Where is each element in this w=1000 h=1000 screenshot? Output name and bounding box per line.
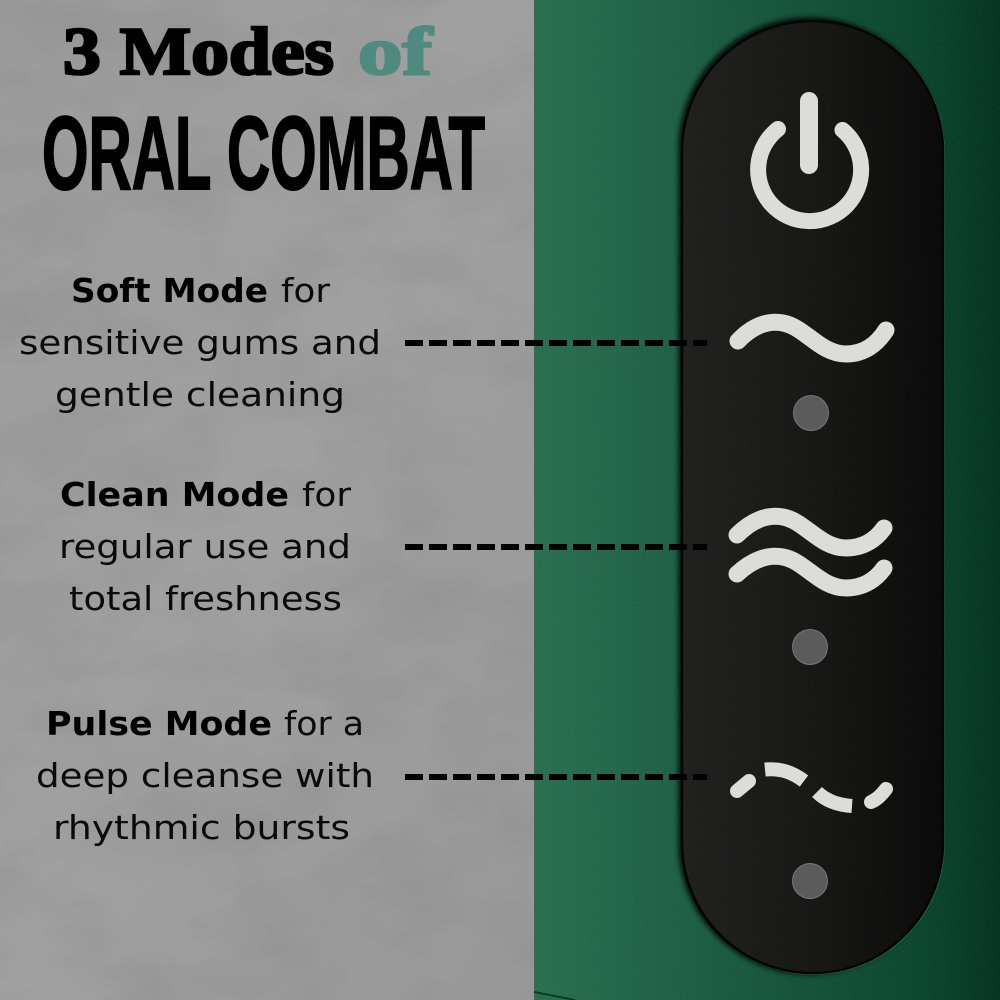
- text block: clean mode: Clean Mode: [60, 475, 289, 514]
- text block: clean mode: regular use and: [59, 527, 351, 566]
- icon: double wave, clean mode: [737, 516, 884, 588]
- connector: pulse mode: [405, 774, 707, 780]
- text block: pulse mode: Pulse Mode: [46, 704, 272, 743]
- text block: soft mode: [19, 271, 381, 414]
- icon: power symbol: [758, 101, 861, 221]
- icon: indicator dot, clean mode: [792, 630, 828, 664]
- panel: black control strip: [678, 17, 944, 975]
- text block: pulse mode: for a: [284, 704, 364, 743]
- text block: clean mode: [59, 475, 351, 618]
- title: 3 Modes of: 3 Modes: [63, 13, 334, 89]
- text block: soft mode: gentle cleaning: [55, 375, 345, 414]
- icon: single wave, soft mode: [738, 322, 886, 354]
- text block: pulse mode: [36, 704, 374, 847]
- text block: soft mode: Soft Mode: [71, 271, 268, 310]
- text block: soft mode: sensitive gums and: [19, 323, 381, 362]
- text block: pulse mode: rhythmic bursts: [53, 808, 350, 847]
- title: ORAL COMBAT: ORAL COMBAT: [42, 96, 485, 212]
- text block: soft mode: for: [281, 271, 330, 310]
- connector: clean mode: [405, 544, 707, 550]
- title: 3 Modes of: of: [358, 13, 434, 89]
- icon: indicator dot, soft mode: [794, 396, 828, 430]
- icon: indicator dot, pulse mode: [792, 864, 828, 898]
- text block: clean mode: for: [302, 475, 351, 514]
- panel: green device body: [534, 0, 1000, 1000]
- text block: pulse mode: deep cleanse with: [36, 756, 374, 795]
- icon: broken wave, pulse mode: [737, 769, 886, 806]
- connector: soft mode: [405, 340, 707, 346]
- title: 3 Modes of: [63, 13, 434, 89]
- text block: clean mode: total freshness: [69, 579, 342, 618]
- panel: grey paper background: [0, 0, 534, 1000]
